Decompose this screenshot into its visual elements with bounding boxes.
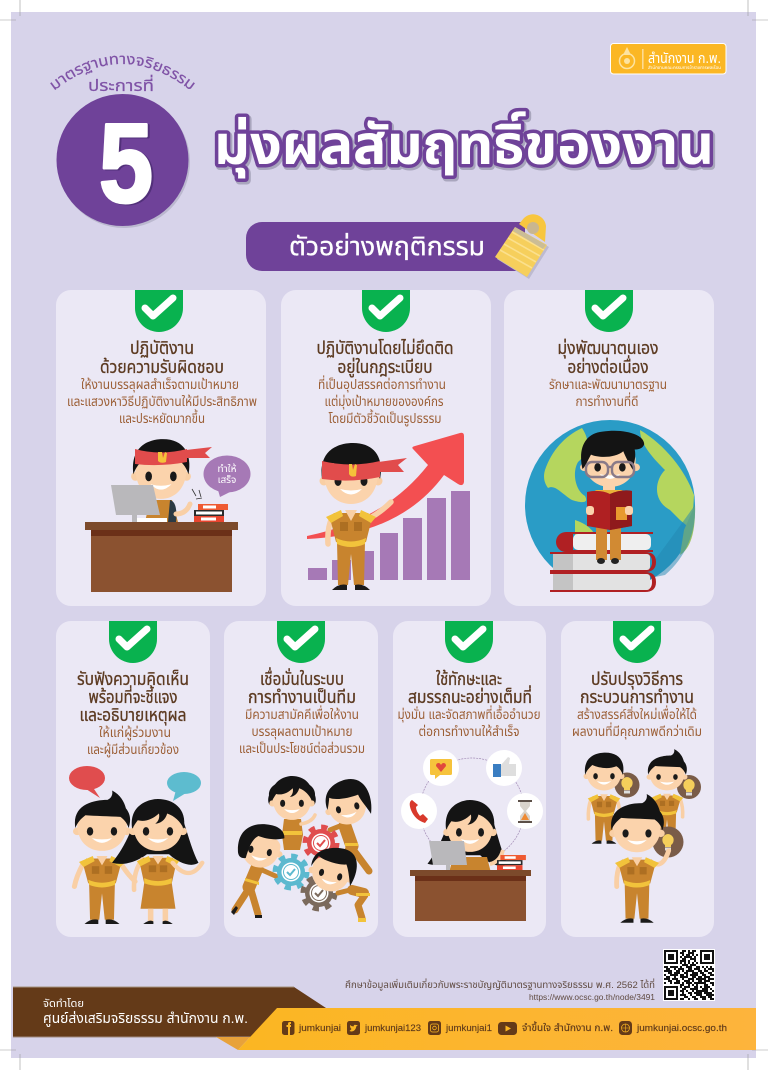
speech bubble: เสร็จ: [218, 473, 236, 486]
icon: youtube: [498, 1022, 517, 1035]
footer brown band: [13, 987, 326, 1037]
heading: [558, 338, 658, 377]
icon: heart message: [423, 750, 459, 786]
description: [398, 705, 540, 739]
logo: OCSC: สำนักงานคณะกรรมการข้าราชการพลเรือน: [648, 64, 721, 70]
illustration: globe: [525, 420, 695, 590]
heading: [408, 669, 532, 707]
description: ให้แก่ผู้ร่วมงาน: [99, 724, 171, 741]
panel: self development: [504, 290, 714, 606]
speech bubble: [204, 456, 250, 497]
illustration: three officers with ideas: [584, 749, 701, 923]
illustration: officer at desk: [85, 439, 238, 592]
description: มุ่งมั่น และจัดสภาพที่เอื้ออำนวย: [398, 705, 540, 723]
footer info text: [345, 978, 655, 1002]
heading: ปฏิบัติงาน: [130, 338, 194, 358]
speech bubble: ทำให้: [218, 463, 237, 475]
heading: เชื่อมั่นในระบบ: [260, 667, 344, 689]
panel: improve process: [561, 621, 714, 937]
icon: globe: [619, 1021, 632, 1035]
description: และเป็นประโยชน์ต่อส่วนรวม: [239, 740, 365, 756]
check badge: [135, 290, 183, 332]
description: แต่มุ่งเป้าหมายขององค์กร: [324, 393, 444, 410]
QR code: [663, 949, 715, 1001]
number badge 5: [56, 94, 190, 228]
heading: สมรรถนะอย่างเต็มที่: [408, 685, 532, 707]
illustration: reading boy on books: [550, 431, 656, 592]
description: [87, 724, 179, 758]
footer orange band with social links: jumkunjai.ocsc.go.th: [636, 1023, 727, 1034]
footer orange band with social links: [216, 1008, 756, 1050]
footer orange band with social links: jumkunjai1: [445, 1023, 492, 1034]
heading: มุ่งพัฒนาตนเอง: [558, 338, 658, 359]
description: บรรลุผลตามเป้าหมาย: [252, 724, 352, 740]
heading: [248, 667, 356, 707]
description: และประหยัดมากขึ้น: [119, 409, 205, 426]
heading: [100, 338, 224, 377]
description: ต่อการทำงานให้สำเร็จ: [418, 723, 520, 739]
check badge: [445, 621, 493, 663]
check badge: [277, 621, 325, 663]
heading: รับฟังความคิดเห็น: [77, 669, 189, 689]
number badge 5: 5: [99, 101, 153, 226]
heading: ปรับปรุงวิธีการ: [591, 669, 683, 690]
description: รักษาและพัฒนามาตรฐาน: [549, 377, 667, 392]
heading: การทำงานเป็นทีม: [248, 687, 356, 707]
check badge: [613, 621, 661, 663]
check badge: [109, 621, 157, 663]
heading: อย่างต่อเนื่อง: [568, 355, 648, 377]
heading: กระบวนการทำงาน: [580, 687, 694, 707]
footer info text: ศึกษาข้อมูลเพิ่มเติมเกี่ยวกับพระราชบัญญัติมาตรฐานทางจริยธรรม พ.ศ. 2562 ได้ที่: [345, 978, 655, 991]
footer orange band with social links: จำขึ้นใจ สำนักงาน ก.พ.: [522, 1021, 613, 1034]
description: [318, 375, 446, 427]
heading: [77, 669, 189, 726]
icon: twitter: [347, 1021, 360, 1035]
description: [549, 377, 667, 409]
arrow: rising: [307, 433, 464, 539]
heading: และอธิบายเหตุผล: [80, 705, 186, 726]
title: มุ่งผลสัมฤทธิ์ของงาน: [216, 113, 716, 180]
panel: teamwork: [224, 621, 378, 937]
footer orange band with social links: jumkunjai123: [364, 1023, 421, 1034]
description: ผลงานที่มีคุณภาพดีกว่าเดิม: [572, 722, 702, 740]
illustration: officer with task icons: [410, 758, 531, 921]
panel: responsibility: [56, 290, 266, 606]
panel: listen to opinions: [56, 621, 210, 937]
illustration: man and woman: [73, 791, 202, 924]
heading: พร้อมที่จะชี้แจง: [88, 685, 178, 707]
illustration: team with gears: [231, 775, 375, 922]
description: [67, 377, 257, 426]
icon: thumbs up: [486, 750, 522, 786]
description: [239, 705, 365, 756]
footer brown band: จัดทำโดย: [43, 998, 84, 1010]
illustration: officer with headband: [320, 443, 407, 590]
banner: behaviour examples: ตัวอย่างพฤติกรรม: [289, 231, 485, 261]
panel: skills and competency: [393, 621, 546, 937]
icon: instagram: [428, 1021, 441, 1035]
description: โดยมีตัวชี้วัดเป็นรูปธรรม: [328, 409, 442, 427]
subtitle: curved standard label: ประการที่: [88, 74, 154, 95]
heading: ด้วยความรับผิดชอบ: [100, 357, 224, 377]
heading: ปฏิบัติงานโดยไม่ยึดติด: [316, 338, 454, 358]
subtitle: curved standard label: มาตรฐานทางจริยธรรม: [50, 56, 195, 90]
description: มีความสามัคคีเพื่อให้งาน: [245, 705, 359, 722]
description: ที่เป็นอุปสรรคต่อการทำงาน: [318, 375, 446, 393]
heading: ใช้ทักษะและ: [436, 669, 502, 689]
footer brown band: ศูนย์ส่งเสริมจริยธรรม สำนักงาน ก.พ.: [43, 1010, 248, 1027]
icon: note tag: [495, 214, 549, 279]
footer info text: https://www.ocsc.go.th/node/3491: [529, 992, 655, 1002]
description: และแสวงหาวิธีปฏิบัติงานให้มีประสิทธิภาพ: [67, 394, 257, 409]
panel: rule-flexible: [281, 290, 491, 606]
title: มุ่งผลสัมฤทธิ์ของงาน: [214, 111, 714, 178]
banner: behaviour examples: [246, 222, 525, 271]
heading: [580, 669, 694, 707]
description: [572, 705, 702, 740]
icon: facebook: [282, 1021, 294, 1035]
number badge 5: 5: [101, 102, 155, 227]
bar chart: [308, 491, 470, 580]
check badge: [362, 290, 410, 332]
heading: อยู่ในกฎระเบียบ: [338, 357, 432, 379]
check badge: [585, 290, 633, 332]
speech bubbles: [69, 766, 201, 801]
icon: telephone: [401, 793, 437, 829]
description: ให้งานบรรลุผลสำเร็จตามเป้าหมาย: [81, 377, 239, 393]
logo: OCSC: [610, 44, 726, 74]
icon: hourglass: [507, 793, 543, 829]
description: การทำงานที่ดี: [576, 392, 638, 409]
footer orange band with social links: jumkunjai: [298, 1023, 341, 1034]
heading: [316, 338, 454, 379]
description: และผู้มีส่วนเกี่ยวข้อง: [87, 740, 179, 758]
logo: OCSC: สำนักงาน ก.พ.: [648, 51, 721, 67]
description: สร้างสรรค์สิ่งใหม่เพื่อให้ได้: [577, 705, 697, 722]
